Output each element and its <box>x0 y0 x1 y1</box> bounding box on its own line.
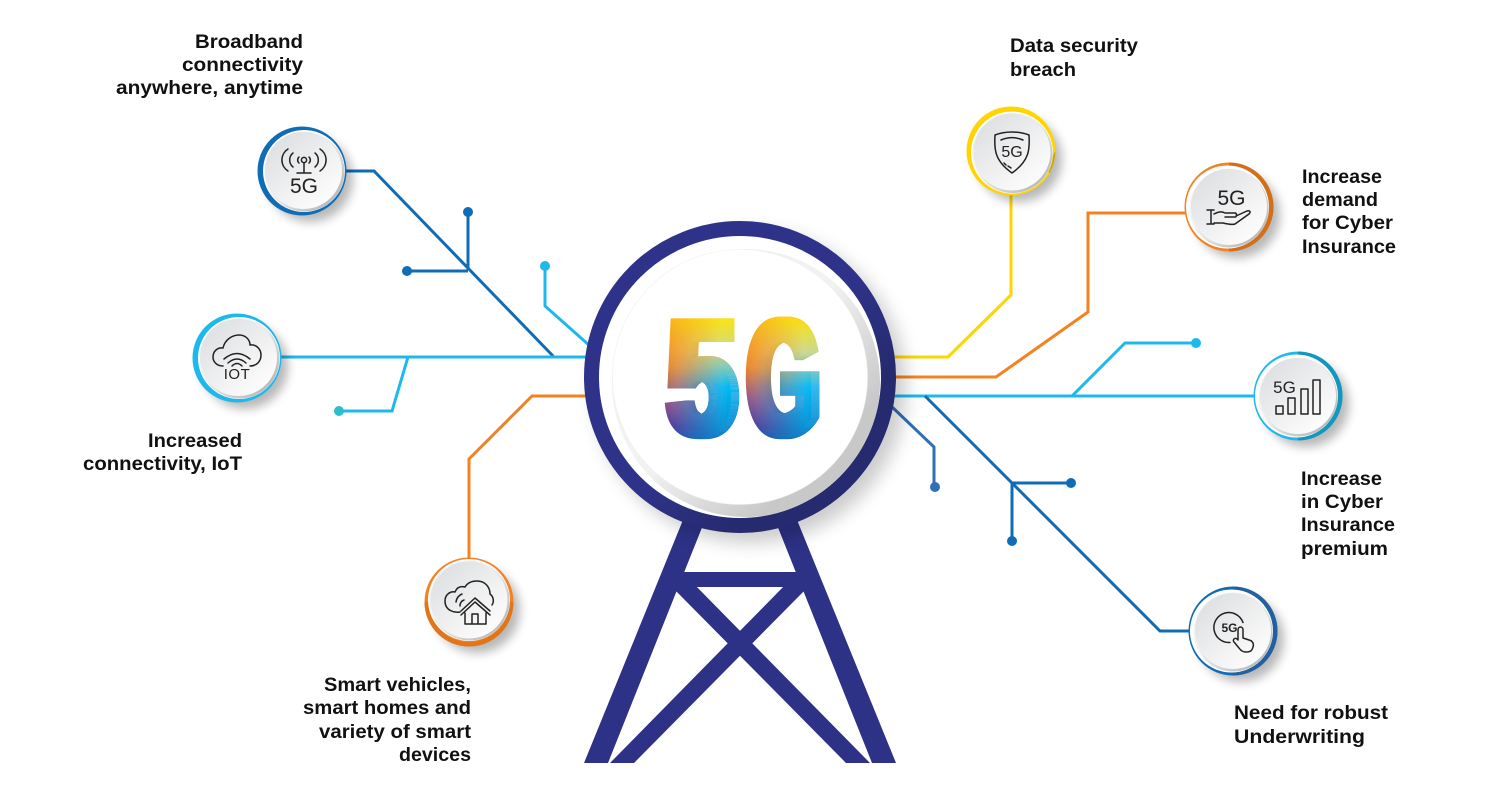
label: demand for cyber insurance: Insurance <box>1302 236 1396 258</box>
5G logo text <box>664 316 820 440</box>
label: cyber insurance premium <box>1301 468 1395 560</box>
label: smart devices: Smart vehicles, <box>324 674 471 696</box>
connector: small cyan branch <box>540 261 590 346</box>
label: cyber insurance premium: Insurance <box>1301 514 1395 536</box>
connector: smart devices <box>469 396 590 560</box>
label: demand for cyber insurance: for Cyber <box>1302 212 1393 234</box>
label: broadband: connectivity <box>182 54 303 76</box>
node: underwriting <box>1188 586 1284 682</box>
connector: broadband <box>344 171 554 357</box>
label: smart devices <box>303 674 472 766</box>
icon: touch 5G: 5G <box>1221 621 1238 635</box>
5G logo text: G <box>748 286 819 469</box>
node: cyber insurance premium <box>1254 352 1349 447</box>
tower <box>584 515 896 763</box>
label: underwriting: Underwriting <box>1234 726 1365 748</box>
icon: antenna 5G: 5G <box>290 175 318 198</box>
5G logo text: G <box>748 286 819 469</box>
label: increased connectivity: connectivity, IoT <box>83 453 242 475</box>
icon: IoT cloud: IOT <box>224 366 250 383</box>
connector: small blue branch <box>890 405 940 492</box>
label: cyber insurance premium: in Cyber <box>1301 491 1383 513</box>
label: broadband <box>116 31 303 99</box>
node: smart devices <box>424 558 520 653</box>
central 5G badge <box>592 228 906 543</box>
label: smart devices: devices <box>399 744 471 766</box>
node: IoT <box>192 314 288 409</box>
label: smart devices: variety of smart <box>319 721 472 743</box>
label: demand for cyber insurance <box>1302 166 1396 258</box>
node: cyber insurance demand <box>1184 162 1280 258</box>
label: demand for cyber insurance: demand <box>1302 189 1378 211</box>
connector: cyber insurance premium <box>890 338 1255 396</box>
label: cyber insurance premium: Increase <box>1301 468 1382 490</box>
label: demand for cyber insurance: Increase <box>1302 166 1382 188</box>
label: broadband: anywhere, anytime <box>116 77 303 99</box>
5G logo text: 5 <box>668 287 736 469</box>
label: smart devices: smart homes and <box>303 697 471 719</box>
5G logo text: 5 <box>668 287 736 469</box>
icon: hand holding 5G: 5G <box>1217 187 1246 210</box>
connector: cyber insurance demand <box>890 213 1186 377</box>
label: underwriting: Need for robust <box>1234 702 1389 724</box>
connector: IoT <box>280 357 590 416</box>
node: data security <box>966 106 1062 202</box>
icon: signal bars: 5G <box>1273 378 1296 397</box>
label: broadband: Broadband <box>195 31 303 53</box>
icon: smart home cloud <box>445 581 493 624</box>
label: data security: breach <box>1010 59 1076 81</box>
label: increased connectivity <box>83 430 242 475</box>
icon: 5G shield: 5G <box>1001 144 1023 161</box>
node: broadband <box>258 126 353 222</box>
connector: data security <box>890 194 1011 357</box>
label: increased connectivity: Increased <box>148 430 242 452</box>
label: data security: Data security <box>1010 35 1138 57</box>
label: cyber insurance premium: premium <box>1301 538 1388 560</box>
label: underwriting <box>1234 702 1389 748</box>
connector: underwriting <box>925 396 1190 631</box>
label: data security <box>1010 35 1138 81</box>
